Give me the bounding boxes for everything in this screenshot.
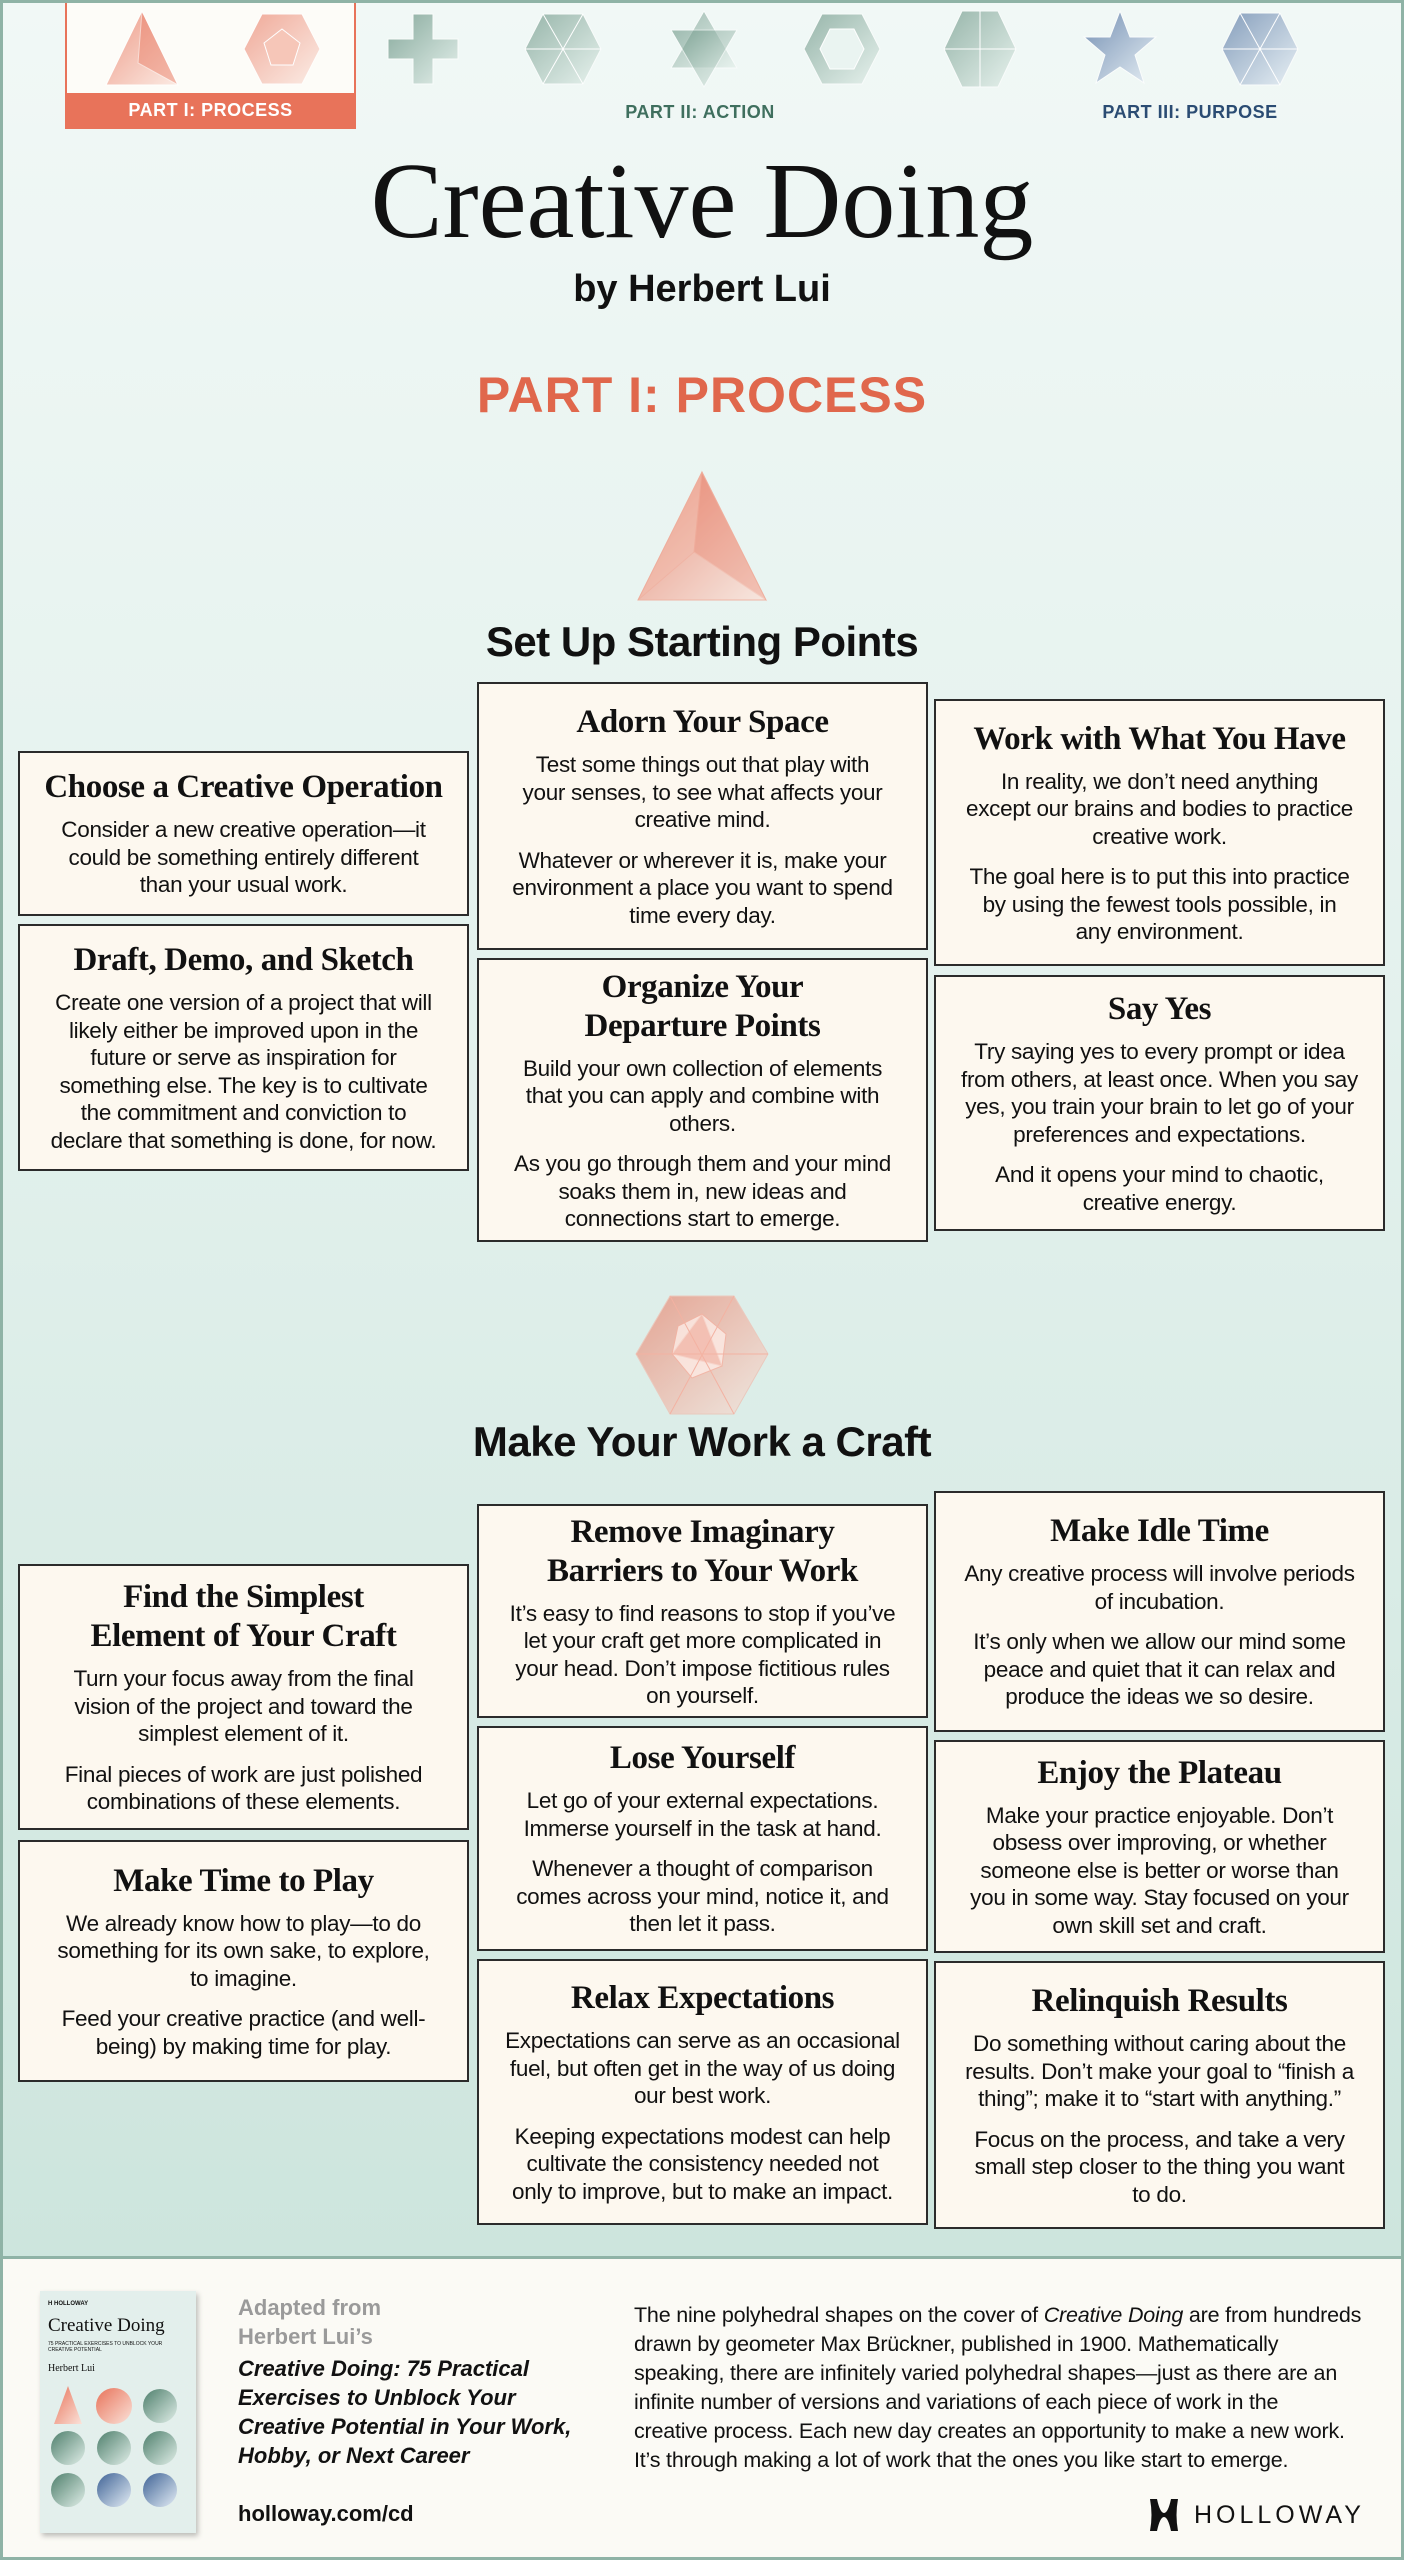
- card: work with what you have: [934, 699, 1385, 966]
- part heading: PART I: PROCESS: [477, 367, 927, 423]
- section heading: make your work a craft: Make Your Work a Craft: [473, 1418, 931, 1465]
- card: make idle time: peace and quiet that it can relax and: [984, 1657, 1335, 1682]
- card: remove imaginary barriers: your head. Don’t impose fictitious rules: [515, 1656, 890, 1680]
- text: description: The nine polyhedral shapes on the cover of Creative Doing are from hundreds: [634, 2303, 1361, 2327]
- card: remove imaginary barriers: on yourself.: [646, 1683, 759, 1708]
- card: say yes: creative energy.: [1083, 1190, 1236, 1214]
- card: enjoy the plateau: Make your practice enjoyable. Don’t: [986, 1803, 1333, 1828]
- card: find the simplest element: Element of Your Craft: [91, 1618, 396, 1654]
- card: relinquish results: Do something without caring about the: [973, 2031, 1346, 2056]
- card: relinquish results: thing”; make it to “start with anything.”: [978, 2086, 1341, 2111]
- card: adorn your space: time every day.: [629, 902, 776, 928]
- card: relax expectations: Expectations can serve as an occasional: [505, 2028, 900, 2053]
- card: organize departure points: soaks them in, new ideas and: [558, 1178, 847, 1204]
- card: make time to play: Make Time to Play: [113, 1863, 374, 1899]
- card: remove imaginary barriers: Remove Imaginary: [570, 1514, 834, 1550]
- card: remove imaginary barriers: Barriers to Your Work: [547, 1552, 858, 1588]
- card: make time to play: We already know how to play—to do: [66, 1911, 421, 1936]
- card: work with what you have: except our brains and bodies to practice: [966, 796, 1353, 821]
- card: make time to play: Feed your creative practice (and well-: [62, 2006, 425, 2031]
- card: draft demo sketch: future or serve as inspiration for: [90, 1045, 397, 1070]
- card: relax expectations: cultivate the consistency needed not: [527, 2151, 878, 2176]
- card: lose yourself: then let it pass.: [629, 1911, 776, 1936]
- nav: shapes: [107, 11, 1298, 87]
- text: adapted from: Herbert Lui’s: [238, 2324, 373, 2349]
- card: make idle time: of incubation.: [1095, 1589, 1224, 1614]
- card: draft demo sketch: Draft, Demo, and Sketch: [73, 942, 414, 978]
- card: say yes: yes, you train your brain to let go of your: [965, 1094, 1354, 1119]
- card: lose yourself: Lose Yourself: [610, 1740, 795, 1776]
- card: adorn your space: [477, 682, 928, 950]
- card: remove imaginary barriers: [477, 1504, 928, 1718]
- card: adorn your space: Whatever or wherever it is, make your: [519, 848, 886, 872]
- text: adapted from: [238, 2295, 571, 2468]
- card: work with what you have: Work with What You Have: [973, 720, 1346, 756]
- card: enjoy the plateau: Enjoy the Plateau: [1037, 1755, 1282, 1791]
- top nav: parts: [65, 3, 1298, 129]
- card: draft demo sketch: likely either be improved upon in the: [69, 1018, 418, 1042]
- footer: [0, 2256, 1404, 2560]
- card: say yes: preferences and expectations.: [1013, 1122, 1306, 1146]
- card: draft demo sketch: declare that something is done, for now.: [51, 1128, 436, 1152]
- card: relinquish results: Focus on the process, and take a very: [974, 2126, 1345, 2152]
- card: make idle time: [934, 1491, 1385, 1732]
- card: work with what you have: The goal here is to put this into practice: [969, 864, 1350, 889]
- card: make idle time: It’s only when we allow our mind some: [973, 1629, 1346, 1654]
- card: work with what you have: In reality, we don’t need anything: [1001, 768, 1318, 794]
- nav: part I box: PART I: PROCESS: [128, 100, 293, 120]
- card: find the simplest element: simplest element of it.: [138, 1721, 349, 1746]
- card: remove imaginary barriers: let your craft get more complicated in: [524, 1628, 881, 1653]
- card: organize departure points: others.: [669, 1110, 736, 1136]
- title: Creative Doing: [371, 142, 1033, 261]
- card: organize departure points: Organize Your: [602, 968, 803, 1004]
- logo: holloway: HOLLOWAY: [1194, 2501, 1365, 2529]
- text: description: infinite number of versions and variations of each piece of work in the: [634, 2390, 1278, 2414]
- card: relax expectations: only to improve, but to make an impact.: [512, 2178, 893, 2204]
- card: relinquish results: small step closer to the thing you want: [975, 2154, 1344, 2179]
- card: relinquish results: results. Don’t make your goal to “finish a: [965, 2058, 1354, 2084]
- card: make idle time: Any creative process will involve periods: [964, 1561, 1355, 1586]
- text: description: [634, 2303, 1361, 2472]
- card: enjoy the plateau: [934, 1740, 1385, 1953]
- card: relax expectations: Relax Expectations: [571, 1980, 834, 2016]
- card: organize departure points: connections start to emerge.: [565, 1206, 840, 1231]
- card: work with what you have: creative work.: [1092, 824, 1227, 848]
- panel: section 1 cards: [18, 682, 1385, 1242]
- card: relax expectations: [477, 1959, 928, 2225]
- card: find the simplest element: [18, 1564, 469, 1830]
- card: choose a creative operation: Choose a Creative Operation: [44, 769, 443, 805]
- card: organize departure points: Build your own collection of elements: [523, 1056, 882, 1080]
- card: draft demo sketch: Create one version of a project that will: [55, 990, 432, 1015]
- card: draft demo sketch: something else. The key is to cultivate: [59, 1072, 428, 1098]
- card: choose a creative operation: could be something entirely different: [69, 845, 418, 870]
- panel: section 2 cards: [18, 1491, 1385, 2229]
- card: organize departure points: that you can apply and combine with: [526, 1083, 879, 1108]
- text: description: speaking, there are infinitely varied polyhedral shapes—just as there are an: [634, 2361, 1337, 2385]
- card: enjoy the plateau: you in some way. Stay focused on your: [970, 1885, 1349, 1910]
- card: organize departure points: Departure Points: [585, 1008, 820, 1044]
- nav: part III label: PART III: PURPOSE: [1102, 102, 1278, 122]
- card: adorn your space: Adorn Your Space: [576, 704, 829, 740]
- icon: triangle polyhedron: [637, 470, 767, 601]
- card: draft demo sketch: [18, 924, 469, 1171]
- subtitle: author: by Herbert Lui: [573, 268, 831, 310]
- card: lose yourself: Immerse yourself in the task at hand.: [524, 1816, 881, 1841]
- logo: holloway: [1150, 2499, 1365, 2531]
- card: find the simplest element: Turn your focus away from the final: [73, 1666, 414, 1691]
- card: choose a creative operation: Consider a new creative operation—it: [61, 817, 426, 842]
- card: lose yourself: [477, 1726, 928, 1951]
- card: choose a creative operation: than your usual work.: [140, 872, 347, 897]
- card: make time to play: being) by making time for play.: [96, 2034, 391, 2059]
- card: make time to play: something for its own sake, to explore,: [57, 1938, 430, 1963]
- card: adorn your space: creative mind.: [635, 807, 770, 832]
- card: relax expectations: Keeping expectations modest can help: [515, 2124, 890, 2148]
- text: description: It’s through making a lot of work that the ones you like start to emerge.: [634, 2448, 1288, 2472]
- card: find the simplest element: Find the Simplest: [123, 1579, 364, 1615]
- text: description: drawn by geometer Max Brückner, published in 1900. Mathematically: [634, 2332, 1278, 2356]
- card: remove imaginary barriers: It’s easy to find reasons to stop if you’ve: [510, 1600, 895, 1626]
- card: adorn your space: Test some things out that play with: [536, 752, 869, 777]
- text: adapted from: Hobby, or Next Career: [238, 2443, 469, 2468]
- text: adapted from: Creative Doing: 75 Practical: [238, 2356, 529, 2381]
- card: draft demo sketch: the commitment and conviction to: [81, 1100, 406, 1125]
- text: url: holloway.com/cd: [238, 2501, 414, 2526]
- card: relinquish results: Relinquish Results: [1032, 1983, 1287, 2019]
- card: adorn your space: your senses, to see what affects your: [523, 780, 882, 804]
- card: find the simplest element: Final pieces of work are just polished: [65, 1762, 422, 1787]
- card: make time to play: [18, 1840, 469, 2082]
- card: lose yourself: Let go of your external expectations.: [527, 1788, 878, 1813]
- card: relax expectations: our best work.: [634, 2083, 771, 2108]
- card: lose yourself: comes across your mind, notice it, and: [516, 1884, 889, 1909]
- card: find the simplest element: combinations of these elements.: [87, 1789, 400, 1814]
- text: adapted from: Exercises to Unblock Your: [238, 2385, 516, 2410]
- nav: part II label: PART II: ACTION: [625, 102, 775, 122]
- card: find the simplest element: vision of the project and toward the: [74, 1694, 413, 1719]
- card: enjoy the plateau: own skill set and craft.: [1052, 1913, 1267, 1938]
- text: adapted from: Creative Potential in Your Work,: [238, 2414, 571, 2439]
- card: relinquish results: to do.: [1132, 2182, 1187, 2206]
- book cover: [40, 2291, 196, 2533]
- card: relax expectations: fuel, but often get in the way of us doing: [510, 2056, 895, 2080]
- card: organize departure points: As you go through them and your mind: [514, 1151, 891, 1176]
- icon: hexagonal polyhedron: [636, 1296, 768, 1414]
- card: say yes: from others, at least once. When you say: [961, 1066, 1358, 1092]
- card: say yes: And it opens your mind to chaotic,: [995, 1162, 1324, 1187]
- section heading: set up starting points: Set Up Starting Points: [486, 618, 918, 665]
- card: say yes: [934, 975, 1385, 1231]
- nav: part I box: [65, 0, 356, 129]
- book cover: H HOLLOWAY: [48, 2301, 88, 2307]
- card: lose yourself: Whenever a thought of comparison: [532, 1856, 873, 1881]
- card: work with what you have: any environment.: [1076, 919, 1243, 944]
- card: choose a creative operation: [18, 751, 469, 916]
- card: organize departure points: [477, 958, 928, 1242]
- text: adapted from: Adapted from: [238, 2295, 381, 2320]
- card: enjoy the plateau: obsess over improving, or whether: [992, 1830, 1326, 1855]
- card: enjoy the plateau: someone else is better or worse than: [980, 1858, 1339, 1883]
- card: make idle time: Make Idle Time: [1050, 1513, 1269, 1549]
- card: say yes: Try saying yes to every prompt or idea: [974, 1039, 1345, 1064]
- card: make time to play: to imagine.: [190, 1966, 297, 1991]
- book cover: Creative Doing: [48, 2315, 165, 2336]
- card: work with what you have: by using the fewest tools possible, in: [983, 892, 1336, 916]
- book cover: Herbert Lui: [48, 2363, 95, 2374]
- card: relinquish results: [934, 1961, 1385, 2229]
- book cover: 75 PRACTICAL EXERCISES TO UNBLOCK YOUR CREATIVE POTENTIAL: [48, 2341, 162, 2353]
- card: make idle time: produce the ideas we so desire.: [1005, 1684, 1314, 1709]
- text: description: creative process. Each new day creates an opportunity to make a new work.: [634, 2419, 1345, 2443]
- card: adorn your space: environment a place you want to spend: [512, 875, 893, 900]
- card: say yes: Say Yes: [1108, 991, 1211, 1027]
